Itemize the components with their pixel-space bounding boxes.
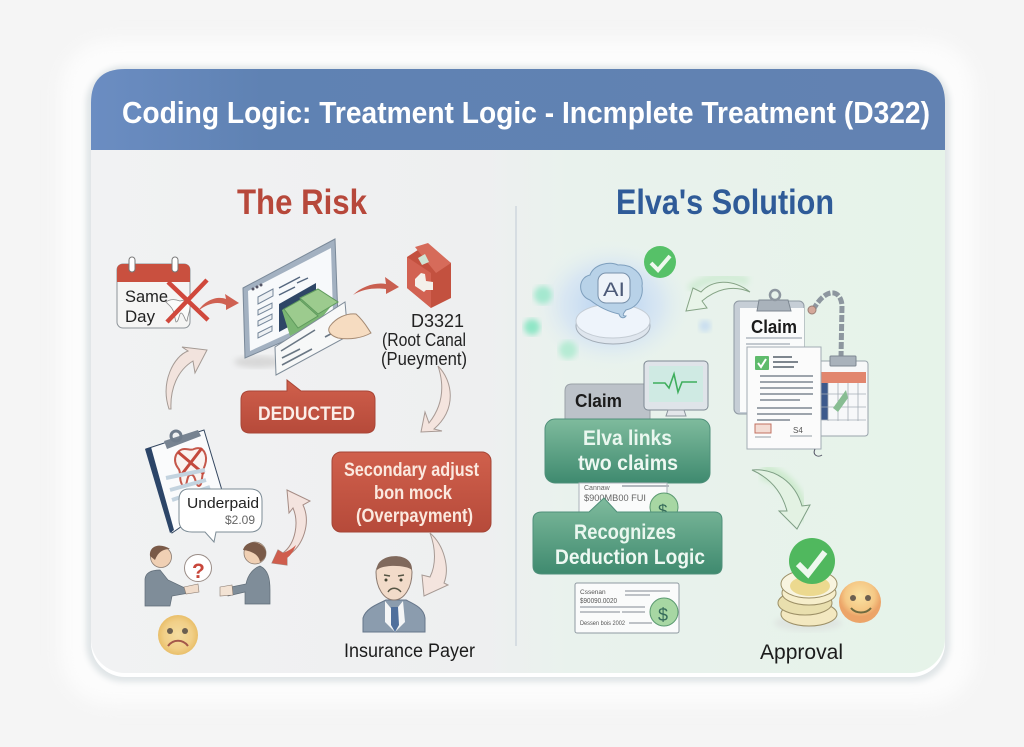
arrow: documents to approval [752,470,810,529]
callout: secondary adjust: bon mock [374,483,452,504]
panel divider [515,206,517,646]
icon: claim clipboard and documents: S4 [793,426,803,435]
callout: deducted [241,380,375,433]
icon: red medical box [407,243,451,308]
panel: main card [86,66,950,682]
middle claim check: Cannaw [584,485,611,492]
icon: sad face [158,615,198,655]
icon: same day calendar: Day [125,307,155,326]
label: approval: Approval [760,641,843,664]
label: D3321: D3321 [411,311,464,331]
arrow: D3321 down to secondary [421,366,450,432]
icon: AI brain on platform: AI [603,280,625,301]
callout: secondary adjust: Secondary adjust [344,460,480,481]
icon: clipboard with crossed tooth [145,430,224,533]
callout: recognizes deduction logic [533,498,722,574]
callout: recognizes deduction logic: Recognizes [574,521,676,544]
speech bubble: underpaid: $2.09 [225,513,255,527]
arrow: loop up to monitor [166,347,207,409]
icon: same day calendar: Same [125,287,168,306]
label: D3321: (Root Canal [382,330,466,350]
middle claim check [579,483,678,521]
speech bubble: underpaid [179,489,262,542]
arrow: two-way people and secondary [272,490,310,565]
callout: deducted: DEDUCTED [258,404,355,425]
callout: Elva links two claims: Elva links [583,427,672,450]
callout: Elva links two claims [545,419,710,483]
icon: lower claim check: Cssenan [580,589,606,596]
title banner [91,69,945,150]
icon: lower claim check: $ [658,605,668,625]
callout: secondary adjust: (Overpayment) [356,506,473,527]
icon: lower claim check [575,583,679,633]
icon: two people with question [145,542,270,606]
callout: Elva links two claims: two claims [578,452,678,475]
heading: The Risk: The Risk [237,183,367,222]
speech bubble: underpaid: Underpaid [187,495,259,512]
arrow: monitor to D3321 [353,277,399,295]
icon: lower claim check: $90090.0020 [580,596,617,605]
middle claim check: $900MB00 FUI [584,493,646,504]
icon: happy face [839,581,881,623]
arrow: secondary to payer [422,533,448,596]
icon: claim clipboard and documents: Claim [751,317,797,337]
panel: the risk [117,183,491,662]
icon: coins with check [774,538,842,631]
icon: AI brain on platform [524,239,711,371]
icon: claim tab with heartbeat monitor [565,361,708,425]
icon: claim clipboard and documents [734,290,868,456]
label: D3321 [381,311,467,369]
icon: green check [644,246,676,278]
label: D3321: (Pueyment) [381,349,467,369]
icon: claim monitor with money [234,239,371,375]
title: Coding Logic: Treatment Logic - Incmplete Treatment (D322) [122,95,930,130]
callout: secondary adjust [332,452,491,532]
label: insurance payer: Insurance Payer [344,641,476,662]
icon: claim tab with heartbeat monitor: Claim [575,390,622,411]
panel: Elva's solution [524,183,881,664]
arrow: calendar to monitor [198,294,239,311]
heading: Elva's Solution: Elva's Solution [616,183,834,222]
icon: two people with question: ? [192,560,205,583]
arrow: claim to AI [686,277,750,311]
icon: same day calendar [117,257,208,328]
callout: recognizes deduction logic: Deduction Logic [555,546,705,569]
middle claim check: $ [658,501,668,520]
icon: insurance payer [363,556,425,632]
icon: lower claim check: Dessen bois 2002 [580,620,625,627]
